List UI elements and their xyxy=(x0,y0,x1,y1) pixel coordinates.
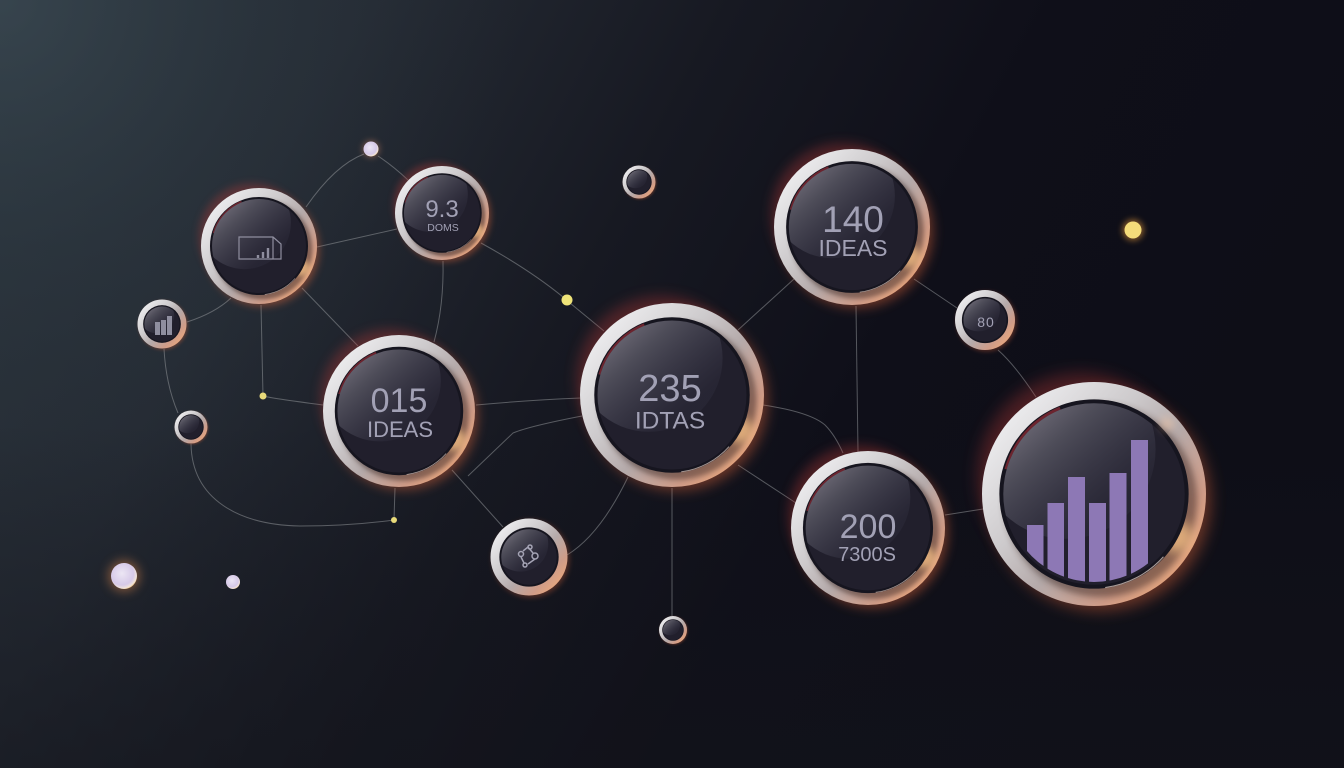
small node: bottom xyxy=(659,615,688,645)
label: DOMS: DOMS xyxy=(427,222,459,234)
node: 200 7300S xyxy=(787,436,948,608)
connector lines xyxy=(164,154,1036,616)
bar chart xyxy=(1027,440,1148,595)
node: small building icon xyxy=(138,298,188,350)
dot: yellow small left xyxy=(260,392,266,400)
dot: pearl top xyxy=(362,140,380,158)
icon: card with signal bars xyxy=(239,237,281,259)
value: 140: 140 xyxy=(822,199,884,240)
dot: pearl glowing lower-left xyxy=(108,560,140,592)
node: 140 IDEAS xyxy=(770,133,933,308)
node: 015 IDEAS xyxy=(319,320,478,490)
value: 80: 80 xyxy=(977,314,995,330)
node: bar chart xyxy=(976,360,1210,610)
dot: yellow right glowing xyxy=(1122,219,1144,241)
flare on ring xyxy=(1162,419,1172,429)
small node: top xyxy=(622,165,656,199)
label: IDTAS: IDTAS xyxy=(635,408,705,434)
label: IDEAS: IDEAS xyxy=(818,235,888,261)
value: 200: 200 xyxy=(840,508,896,546)
small node: left xyxy=(174,410,208,444)
node: 235 IDTAS xyxy=(575,285,768,491)
node: signal card icon xyxy=(198,176,319,306)
label: 7300S: 7300S xyxy=(838,544,896,566)
node: 9.3 DOMS xyxy=(393,157,491,262)
node: network icon xyxy=(490,516,569,597)
value: 9.3: 9.3 xyxy=(425,196,459,223)
value: 015: 015 xyxy=(371,382,427,420)
dot: pearl small lower-left xyxy=(226,575,240,589)
icon: network cluster xyxy=(518,545,538,567)
value: 235: 235 xyxy=(638,368,702,410)
node: 80 xyxy=(955,288,1016,352)
label: IDEAS: IDEAS xyxy=(367,417,433,442)
dot: yellow small bottom xyxy=(391,517,397,523)
dot: yellow centre xyxy=(562,294,572,306)
icon: mini bars xyxy=(155,316,172,335)
